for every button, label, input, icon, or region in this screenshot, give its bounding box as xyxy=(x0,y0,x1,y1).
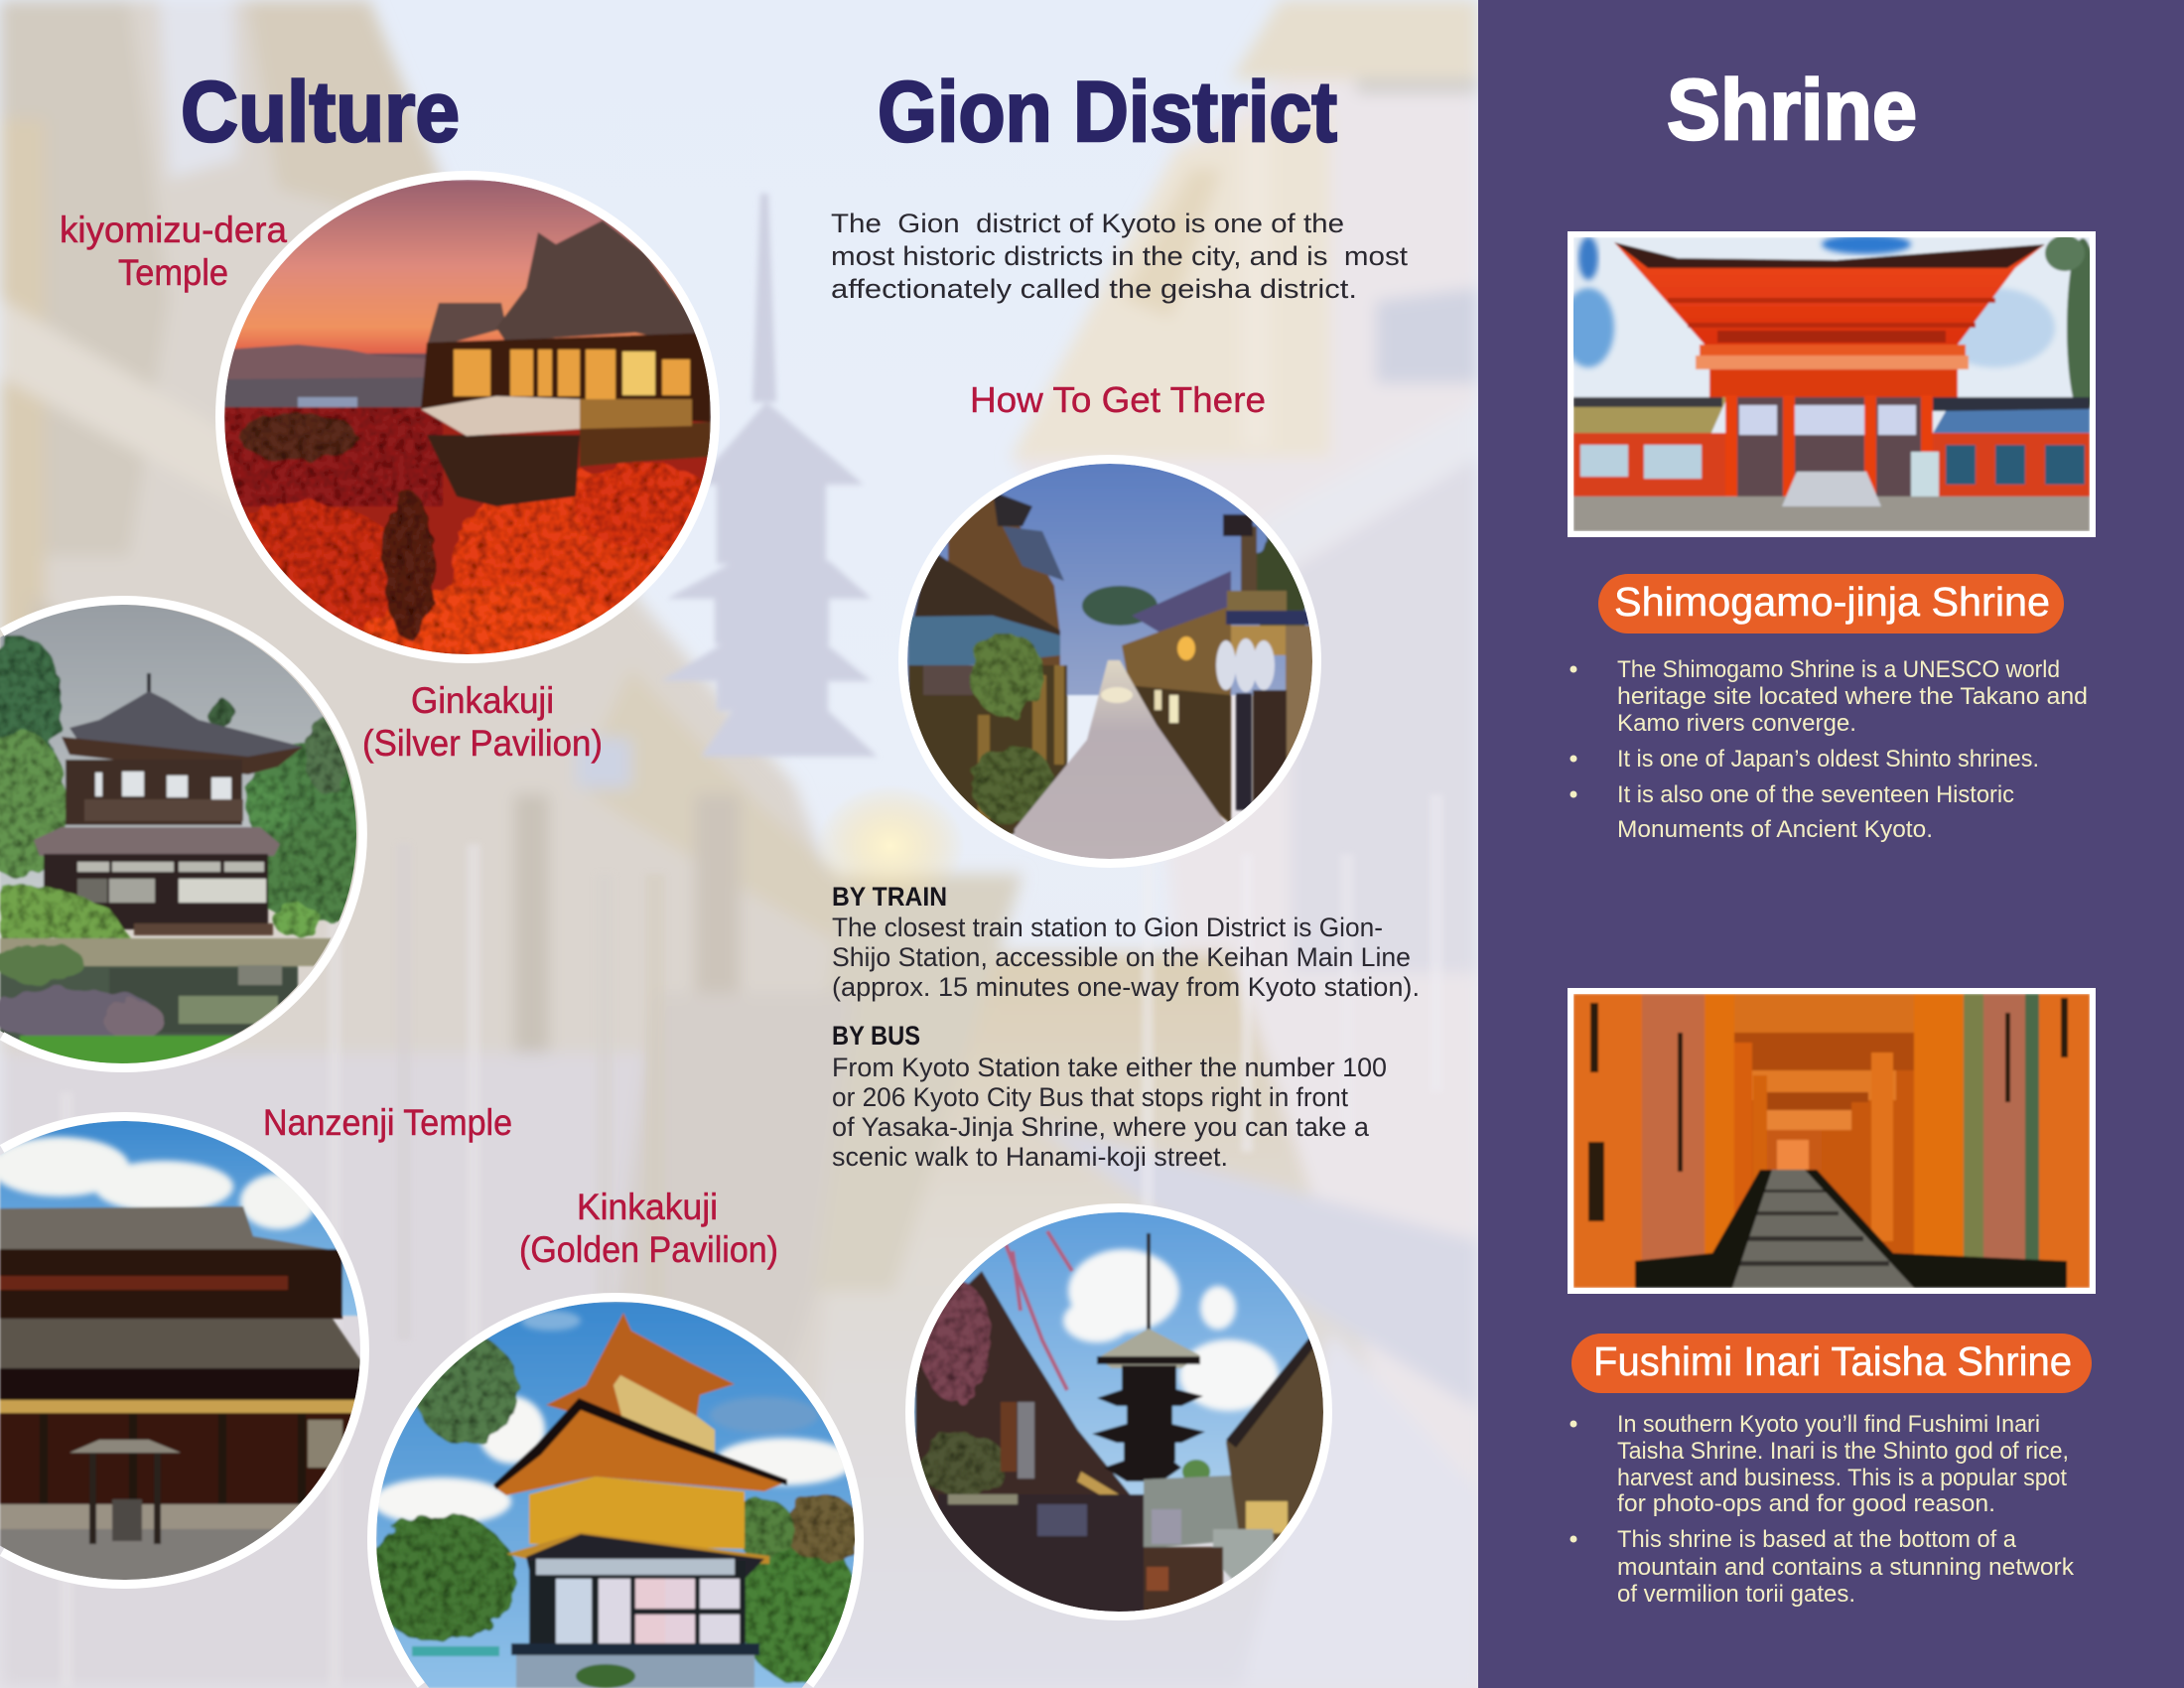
bullet list: Shimogamo shrine facts: Monuments of Ancient Kyoto. xyxy=(1617,816,1933,843)
bullet list: Fushimi Inari facts: of vermilion torii gates. xyxy=(1617,1581,1855,1608)
photo: Shimogamo shrine gate xyxy=(1563,231,2099,537)
background sun flare xyxy=(823,789,959,894)
photo: Nanzenji temple xyxy=(0,1116,367,1589)
text block: by bus: or 206 Kyoto City Bus that stops right in front xyxy=(832,1082,1348,1112)
intro text: Gion district description: The Gion district of Kyoto is one of the xyxy=(831,209,1344,238)
text block: by bus: From Kyoto Station take either the number 100 xyxy=(832,1053,1387,1082)
bullet list: Shimogamo shrine facts: Kamo rivers converge. xyxy=(1617,710,1856,737)
bullet list: Shimogamo shrine facts: The Shimogamo Shrine is a UNESCO world xyxy=(1617,656,2060,683)
bullet list: Fushimi Inari facts xyxy=(1570,1411,2075,1608)
label: Kinkakuji (Golden Pavilion): (Golden Pavilion) xyxy=(519,1229,778,1270)
text block: by train: The closest train station to Gion District is Gion- xyxy=(832,913,1383,942)
photo: Kinkakuji golden pavilion xyxy=(367,1297,864,1688)
bullet list: Fushimi Inari facts: mountain and contains a stunning network xyxy=(1617,1554,2075,1581)
photo: Gion evening street xyxy=(898,457,1325,864)
bullet list: Fushimi Inari facts: Taisha Shrine. Inari is the Shinto god of rice, xyxy=(1617,1438,2069,1465)
label: Kinkakuji (Golden Pavilion): Kinkakuji xyxy=(577,1187,718,1227)
photo: Fushimi Inari torii gates xyxy=(1568,988,2096,1294)
panel: shrine background xyxy=(1478,0,2184,1688)
label: Kinkakuji (Golden Pavilion) xyxy=(519,1187,778,1270)
photo: Kiyomizu-dera temple at sunset xyxy=(204,175,720,685)
bullet list: Shimogamo shrine facts: It is one of Japan’s oldest Shinto shrines. xyxy=(1617,746,2039,773)
photo: Yasaka pagoda street xyxy=(908,1206,1335,1618)
text block: by bus: of Yasaka-Jinja Shrine, where you can take a xyxy=(832,1112,1370,1142)
bullet list: Fushimi Inari facts: In southern Kyoto you’ll find Fushimi Inari xyxy=(1617,1411,2040,1438)
pill heading: Shimogamo-jinja Shrine: Shimogamo-jinja Shrine xyxy=(1614,579,2050,625)
bullet list: Fushimi Inari facts: harvest and business. This is a popular spot xyxy=(1617,1465,2067,1491)
bullet list: Fushimi Inari facts: for photo-ops and for good reason. xyxy=(1617,1490,1995,1517)
heading: How To Get There: How To Get There xyxy=(970,379,1266,420)
label: kiyomizu-dera Temple: kiyomizu-dera xyxy=(60,210,287,250)
label: Ginkakuji (Silver Pavilion) xyxy=(362,680,603,764)
text block: by bus: BY BUS xyxy=(832,1021,920,1051)
bullet list: Shimogamo shrine facts xyxy=(1570,656,2088,843)
pill heading: Fushimi Inari Taisha Shrine: Fushimi Inari Taisha Shrine xyxy=(1593,1338,2072,1384)
text block: by train: (approx. 15 minutes one-way from Kyoto station). xyxy=(832,972,1420,1002)
intro text: Gion district description: most historic districts in the city, and is most xyxy=(831,241,1409,271)
text block: by train: Shijo Station, accessible on the Keihan Main Line xyxy=(832,942,1411,972)
label: kiyomizu-dera Temple: Temple xyxy=(118,252,228,293)
title: Culture: Culture xyxy=(181,65,460,160)
label: Ginkakuji (Silver Pavilion): Ginkakuji xyxy=(411,680,554,721)
text block: by bus xyxy=(832,1021,1387,1172)
intro text: Gion district description: affectionately called the geisha district. xyxy=(831,274,1357,304)
text block: by bus: scenic walk to Hanami-koji street. xyxy=(832,1142,1228,1172)
title: Shrine: Shrine xyxy=(1667,63,1917,158)
title: Gion District: Gion District xyxy=(878,65,1337,160)
bullet list: Fushimi Inari facts: This shrine is based at the bottom of a xyxy=(1617,1526,2017,1553)
background vertical stripes xyxy=(330,846,1254,1276)
intro text: Gion district description xyxy=(831,209,1409,304)
label: Nanzenji Temple: Nanzenji Temple xyxy=(263,1102,512,1143)
label: kiyomizu-dera Temple xyxy=(60,210,287,293)
bullet list: Shimogamo shrine facts: It is also one of the seventeen Historic xyxy=(1617,781,2014,808)
bullet list: Shimogamo shrine facts: heritage site located where the Takano and xyxy=(1617,683,2088,710)
photo: Ginkakuji silver pavilion xyxy=(0,601,387,1068)
background photo: washed-out Kyoto street with pagoda xyxy=(0,0,1478,1688)
label: Ginkakuji (Silver Pavilion): (Silver Pavilion) xyxy=(362,723,603,764)
text block: by train: BY TRAIN xyxy=(832,882,947,912)
text block: by train xyxy=(832,882,1420,1002)
background pagoda silhouette xyxy=(661,194,878,757)
